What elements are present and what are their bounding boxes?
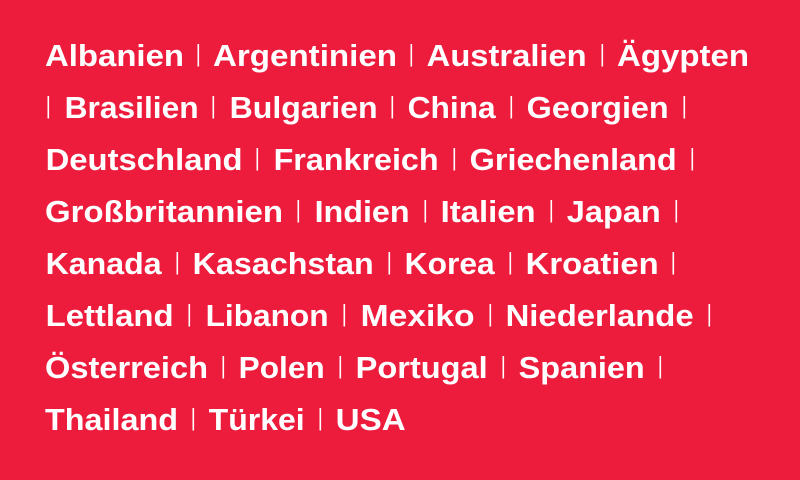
text row 5 xyxy=(46,246,674,281)
text row 6: Mexiko xyxy=(361,298,475,333)
text row 5: Kroatien xyxy=(526,246,659,281)
text row 4: Großbritannien xyxy=(45,194,283,229)
text row 1: Albanien xyxy=(45,38,184,73)
text row 4: Italien xyxy=(441,194,536,229)
text row 6 xyxy=(46,298,710,333)
text row 8: USA xyxy=(336,402,406,437)
text row 4 xyxy=(45,194,677,229)
text row 3: Griechenland xyxy=(470,142,677,177)
text row 7: Österreich xyxy=(45,350,208,385)
text row 3 xyxy=(46,142,693,177)
text row 7: Portugal xyxy=(356,350,488,385)
text row 3: Frankreich xyxy=(274,142,439,177)
text row 7 xyxy=(45,350,661,385)
text row 8: Thailand xyxy=(45,402,178,437)
text row 6: Niederlande xyxy=(506,298,694,333)
text row 2 xyxy=(48,90,685,125)
text row 5: Korea xyxy=(405,246,495,281)
text row 7: Spanien xyxy=(519,350,645,385)
text row 4: Indien xyxy=(315,194,410,229)
text row 1: Argentinien xyxy=(213,38,397,73)
text row 4: Japan xyxy=(567,194,661,229)
text row 2: Bulgarien xyxy=(230,90,378,125)
text row 6: Libanon xyxy=(206,298,329,333)
text row 5: Kanada xyxy=(46,246,162,281)
text row 1: Australien xyxy=(427,38,587,73)
text row 5: Kasachstan xyxy=(193,246,374,281)
text row 8: Türkei xyxy=(209,402,305,437)
text row 2: Brasilien xyxy=(65,90,199,125)
text row 1 xyxy=(45,38,749,73)
text row 8 xyxy=(45,402,406,437)
text row 3: Deutschland xyxy=(46,142,243,177)
text row 6: Lettland xyxy=(46,298,174,333)
text row 1: Ägypten xyxy=(617,38,749,73)
text row 7: Polen xyxy=(239,350,325,385)
text row 2: Georgien xyxy=(527,90,669,125)
text row 2: China xyxy=(408,90,496,125)
